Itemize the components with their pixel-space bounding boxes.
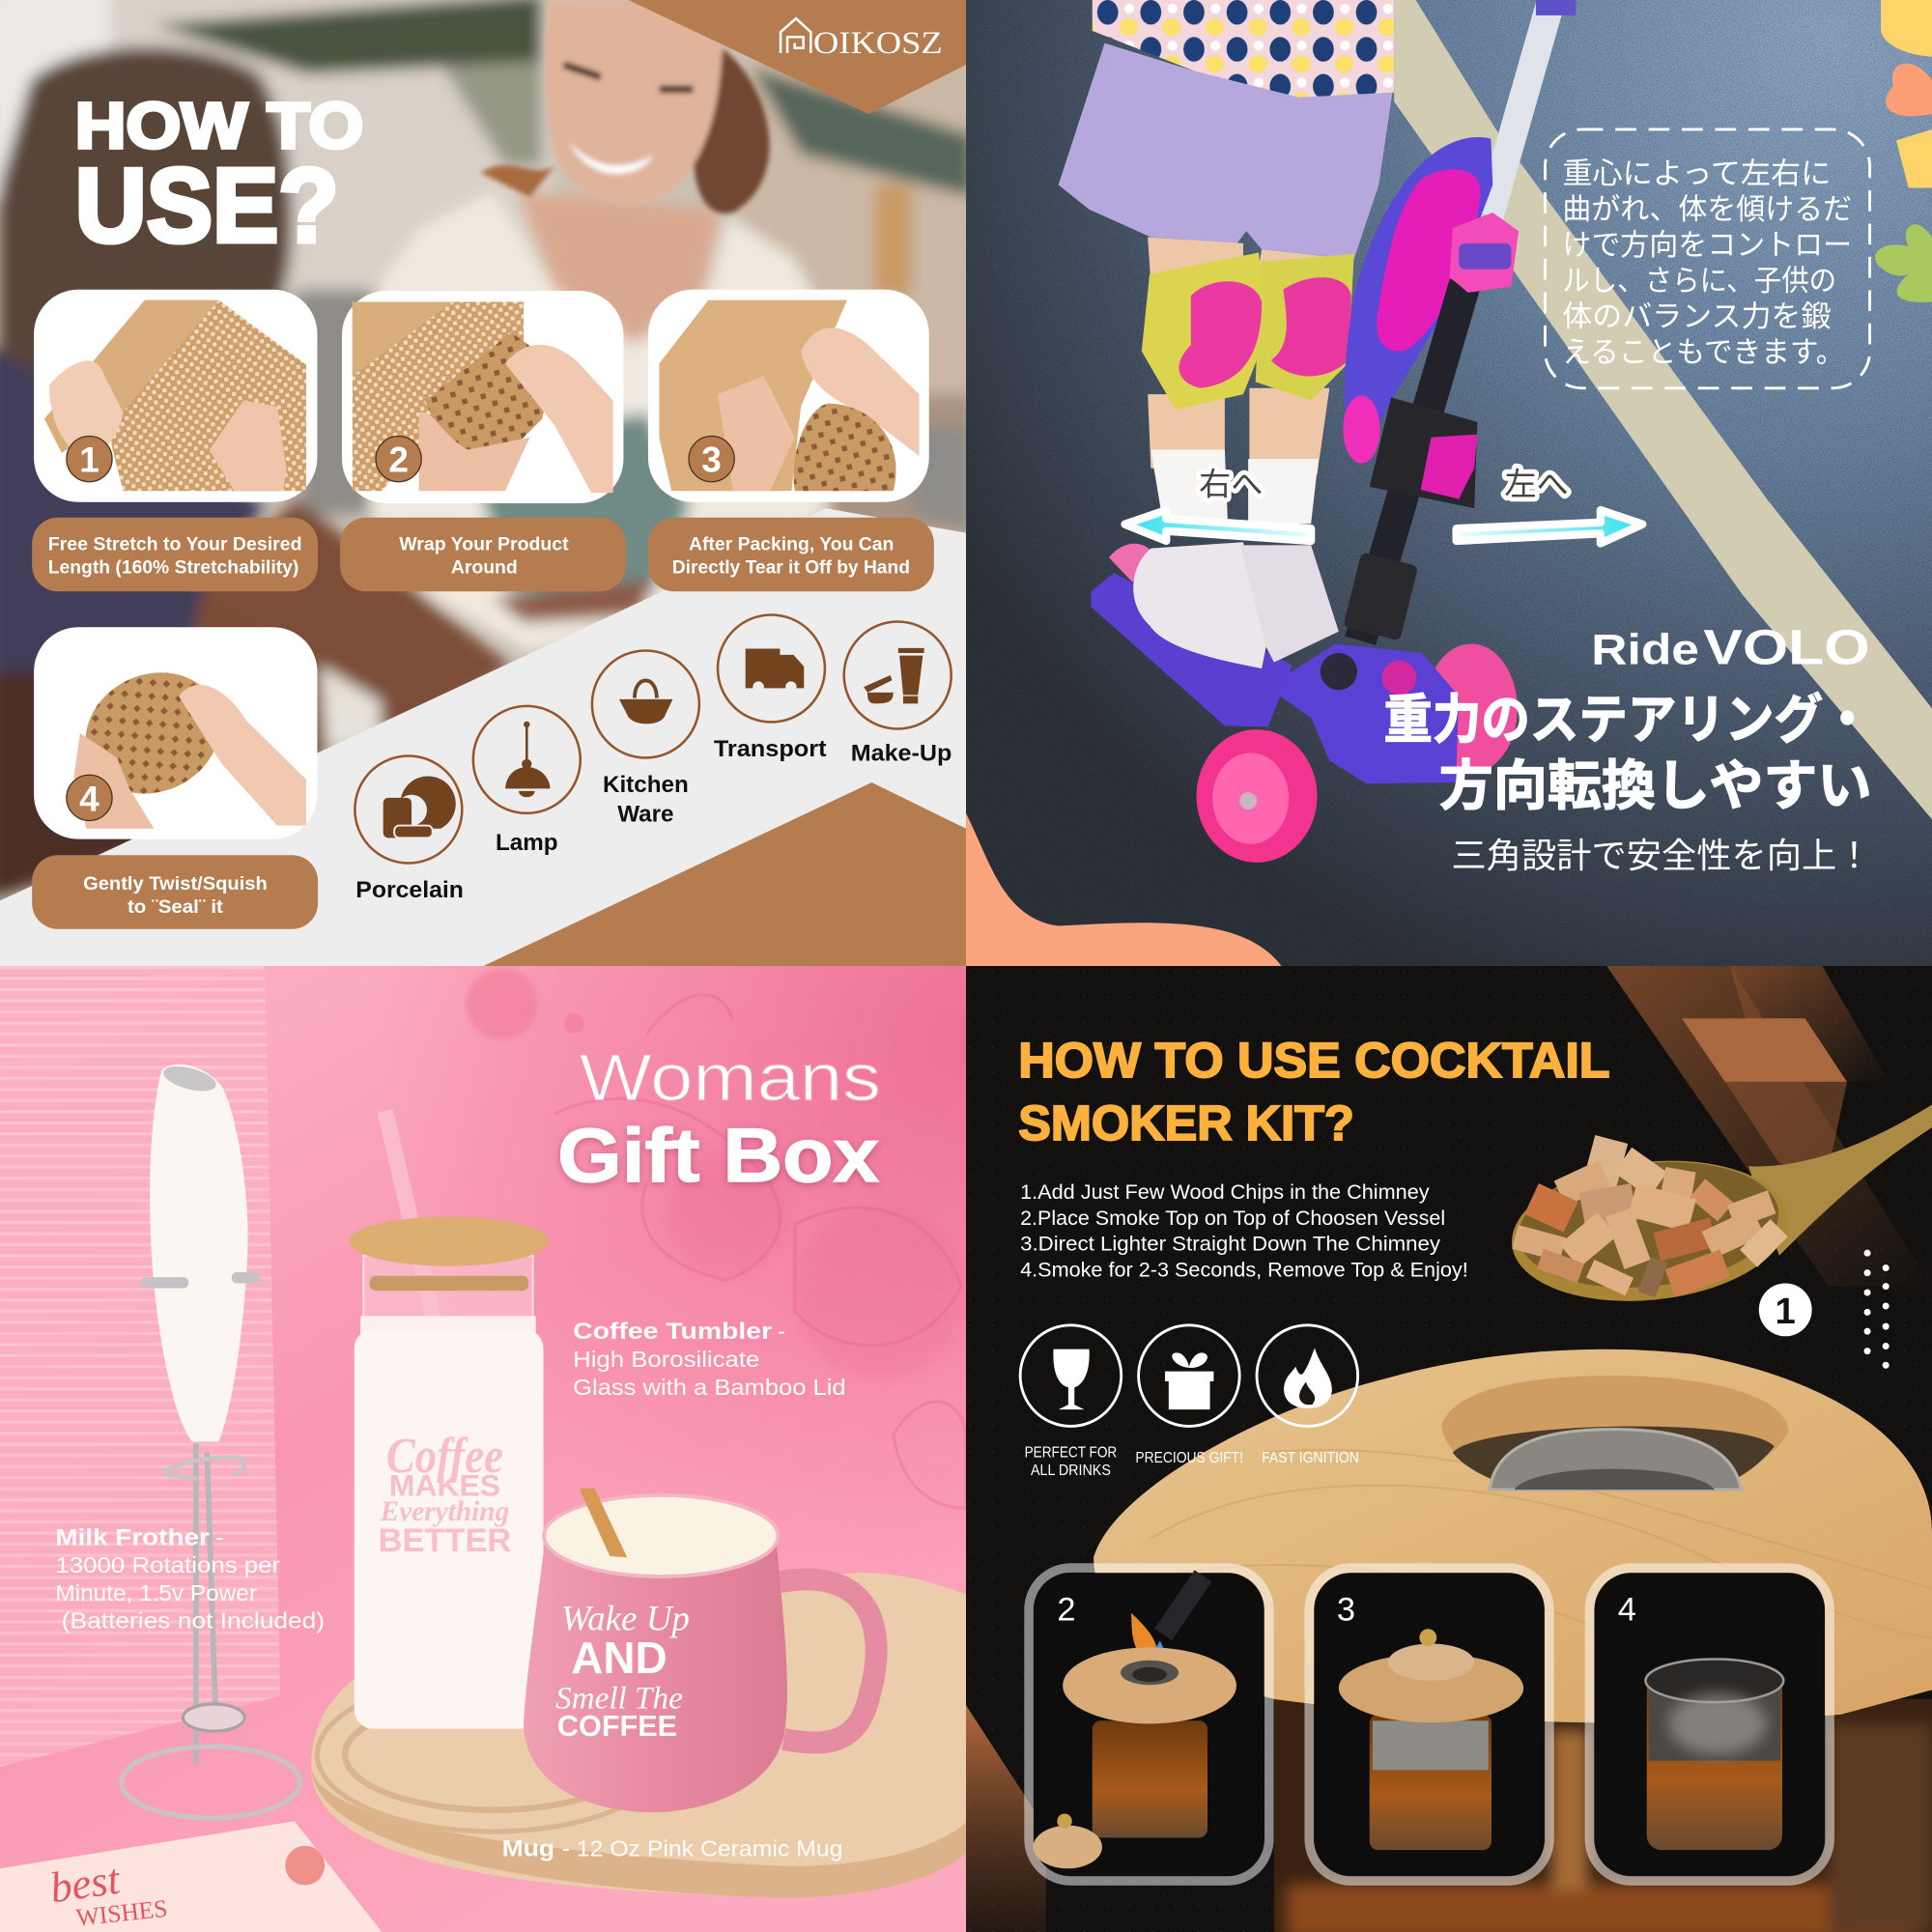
mug print	[555, 1598, 690, 1743]
brand logo	[781, 18, 943, 61]
use: porcelain: Porcelain	[355, 877, 464, 903]
instructions: 2.Place Smoke Top on Top of Choosen Vessel	[1020, 1208, 1445, 1230]
subheadline: 三角設計で安全性を向上！	[1452, 837, 1872, 875]
road background	[966, 0, 1932, 966]
decorative shape: yellow top	[1881, 0, 1932, 57]
step number 1	[67, 437, 112, 482]
step 3 caption	[648, 518, 934, 591]
coffee mug	[524, 1489, 876, 1812]
callout: coffee tumbler	[573, 1319, 846, 1400]
use: porcelain	[355, 756, 464, 903]
photo background: man and woman	[0, 0, 985, 966]
step 2 caption	[340, 518, 626, 591]
title: how to use: USE?	[75, 147, 339, 264]
step 2 caption: Around	[451, 557, 518, 579]
icon: wine glass: PERFECT FOR	[1025, 1444, 1117, 1461]
title: how to use cocktail smoker kit: SMOKER KIT?	[1018, 1095, 1354, 1151]
step 3 card	[648, 290, 929, 502]
step 4 card	[34, 627, 317, 839]
dashed callout	[1545, 129, 1870, 388]
road grain texture	[966, 0, 1932, 966]
callout: coffee tumbler: High Borosilicate	[573, 1347, 759, 1372]
step 1 card	[34, 290, 317, 502]
callout: mug: Mug	[502, 1836, 554, 1862]
panel: kraft paper how to use	[0, 0, 966, 966]
step number 1: 1	[79, 440, 99, 480]
callout: coffee tumbler: Coffee Tumbler	[573, 1319, 773, 1345]
icon: wine glass	[1020, 1325, 1122, 1479]
step 2 card: 2	[1057, 1591, 1076, 1628]
instructions: 4.Smoke for 2-3 Seconds, Remove Top & Enjoy!	[1020, 1259, 1468, 1281]
step 1 caption	[32, 518, 318, 591]
step 4 caption: to ¨Seal¨ it	[128, 896, 223, 918]
brown corner shape top right	[629, 0, 966, 114]
step 4 caption: Gently Twist/Squish	[83, 873, 268, 895]
instructions: 3.Direct Lighter Straight Down The Chimney	[1020, 1234, 1441, 1256]
panel: scooter gravity steering	[966, 0, 1932, 966]
dashed callout: 体のバランス力を鍛	[1562, 300, 1831, 333]
step number 2	[376, 437, 421, 482]
title: womans gift box: Womans	[579, 1040, 881, 1115]
decorative shape: green leaf	[1875, 224, 1932, 302]
step 1 badge: 1	[1776, 1291, 1796, 1332]
icon: wine glass: ALL DRINKS	[1031, 1463, 1111, 1479]
step 2 card	[1029, 1568, 1269, 1881]
title: how to use cocktail smoker kit: HOW TO USE COCKTAIL	[1018, 1033, 1609, 1088]
callout: milk frother: 13000 Rotations per	[55, 1552, 281, 1577]
step number 3: 3	[701, 440, 722, 480]
tumbler print	[379, 1428, 511, 1559]
use: transport	[714, 614, 827, 762]
step 2 caption: Wrap Your Product	[399, 534, 569, 555]
step 2 card	[342, 291, 623, 503]
step number 4: 4	[79, 779, 99, 818]
wooden smoke top	[1094, 1350, 1932, 1723]
floral wash	[0, 966, 967, 1767]
callout: coffee tumbler: Glass with a Bamboo Lid	[573, 1375, 846, 1400]
step number 3	[689, 437, 734, 482]
step 3 caption: Directly Tear it Off by Hand	[672, 557, 910, 579]
dashed callout: えることもできます。	[1562, 336, 1844, 369]
step 3 caption: After Packing, You Can	[689, 534, 894, 555]
use: lamp: Lamp	[496, 830, 558, 856]
decorative shape: peach blob	[966, 813, 1282, 966]
title: how to use	[75, 90, 363, 264]
step 1 badge	[1759, 1283, 1812, 1336]
coffee tumbler	[349, 1111, 549, 1729]
step 4 card	[1589, 1568, 1830, 1881]
instructions: 1.Add Just Few Wood Chips in the Chimney	[1020, 1181, 1430, 1204]
headline: ride volo: VOLO	[1703, 619, 1870, 674]
arrow: right direction	[1125, 510, 1311, 541]
step number 4	[67, 775, 112, 820]
step 3 card: 3	[1337, 1591, 1355, 1628]
headline: ride volo	[1383, 619, 1872, 816]
tumbler print: Coffee	[386, 1428, 503, 1484]
instructions	[1020, 1181, 1468, 1281]
mug print: Wake Up	[561, 1598, 690, 1637]
use: kitchen ware: Ware	[617, 802, 674, 828]
decorative shape: orange heart	[1886, 64, 1932, 116]
use: kitchen ware: Kitchen	[603, 772, 689, 798]
step 4 caption	[32, 855, 318, 929]
use: transport: Transport	[714, 736, 827, 762]
grey diagonal background	[0, 508, 966, 966]
callout: mug: - 12 Oz Pink Ceramic Mug	[562, 1836, 842, 1861]
callout: milk frother: -	[215, 1524, 223, 1550]
spoon of wood chips	[1505, 1104, 1932, 1314]
headline: ride volo: 方向転換しやすい	[1439, 755, 1871, 816]
title: how to use: HOW TO	[75, 90, 363, 162]
greeting card	[0, 1821, 382, 1932]
icon: gift: PRECIOUS GIFT!	[1135, 1450, 1243, 1466]
step 1 caption: Length (160% Stretchability)	[48, 557, 298, 579]
icon: flame: FAST IGNITION	[1262, 1450, 1359, 1466]
panel: womans gift box	[0, 966, 966, 1932]
callout: milk frother: (Batteries not Included)	[62, 1608, 325, 1634]
tumbler print: BETTER	[379, 1522, 511, 1559]
brand logo: OIKOSZ	[813, 25, 943, 61]
dot column decoration	[1864, 1250, 1889, 1369]
step number 2: 2	[388, 440, 409, 480]
tumbler print: Everything	[380, 1496, 509, 1527]
panel: cocktail smoker kit	[966, 966, 1932, 1932]
headline: ride volo: 重力のステアリング・	[1383, 690, 1871, 750]
callout: coffee tumbler: -	[778, 1319, 785, 1345]
wood tray	[311, 1573, 966, 1898]
tumbler print: MAKES	[389, 1467, 500, 1502]
label: right: 右へ	[1199, 468, 1263, 503]
dashed callout: 曲がれ、体を傾けるだ	[1562, 193, 1852, 226]
acrylic panel	[0, 966, 280, 1767]
headline: ride volo: Ride	[1591, 626, 1699, 673]
icon: gift	[1135, 1325, 1243, 1466]
title: womans gift box: Gift Box	[557, 1112, 879, 1198]
icon: flame	[1257, 1325, 1359, 1466]
step 3 card	[1309, 1568, 1549, 1881]
callout: milk frother: Minute, 1.5v Power	[55, 1580, 257, 1605]
dark background	[966, 966, 1932, 1932]
brown corner shape bottom right	[484, 782, 966, 966]
mug print: AND	[571, 1633, 668, 1683]
pink background	[0, 966, 966, 1932]
greeting card: best	[47, 1855, 124, 1912]
title: how to use cocktail smoker kit	[1018, 1033, 1609, 1151]
bronze geometric shapes	[966, 966, 1932, 1932]
arrow: left direction	[1457, 510, 1642, 543]
road line	[1394, 0, 1932, 819]
mug print: Smell The	[555, 1680, 683, 1716]
dashed callout: 重心によって左右に	[1562, 157, 1831, 190]
decorative shape: yellow lower	[1896, 129, 1932, 188]
dashed callout: けで方向をコントロー	[1562, 229, 1852, 262]
use: kitchen ware	[592, 650, 699, 828]
step 1 caption: Free Stretch to Your Desired	[48, 534, 301, 555]
whiskey glass background	[1274, 1699, 1932, 1932]
use: make-up	[844, 621, 952, 767]
title: womans gift box	[557, 1040, 881, 1198]
step 4 card: 4	[1618, 1591, 1636, 1628]
label: left: 左へ	[1504, 468, 1569, 503]
dashed callout: ルし、さらに、子供の	[1562, 265, 1836, 298]
use: lamp	[473, 706, 581, 856]
callout: milk frother: Milk Frother	[55, 1524, 210, 1550]
use: make-up: Make-Up	[851, 741, 952, 767]
mug print: COFFEE	[557, 1710, 677, 1743]
milk frother	[122, 1062, 300, 1818]
child and scooter photo	[1059, 0, 1576, 863]
greeting card: WISHES	[74, 1894, 169, 1932]
callout: milk frother	[55, 1524, 325, 1634]
